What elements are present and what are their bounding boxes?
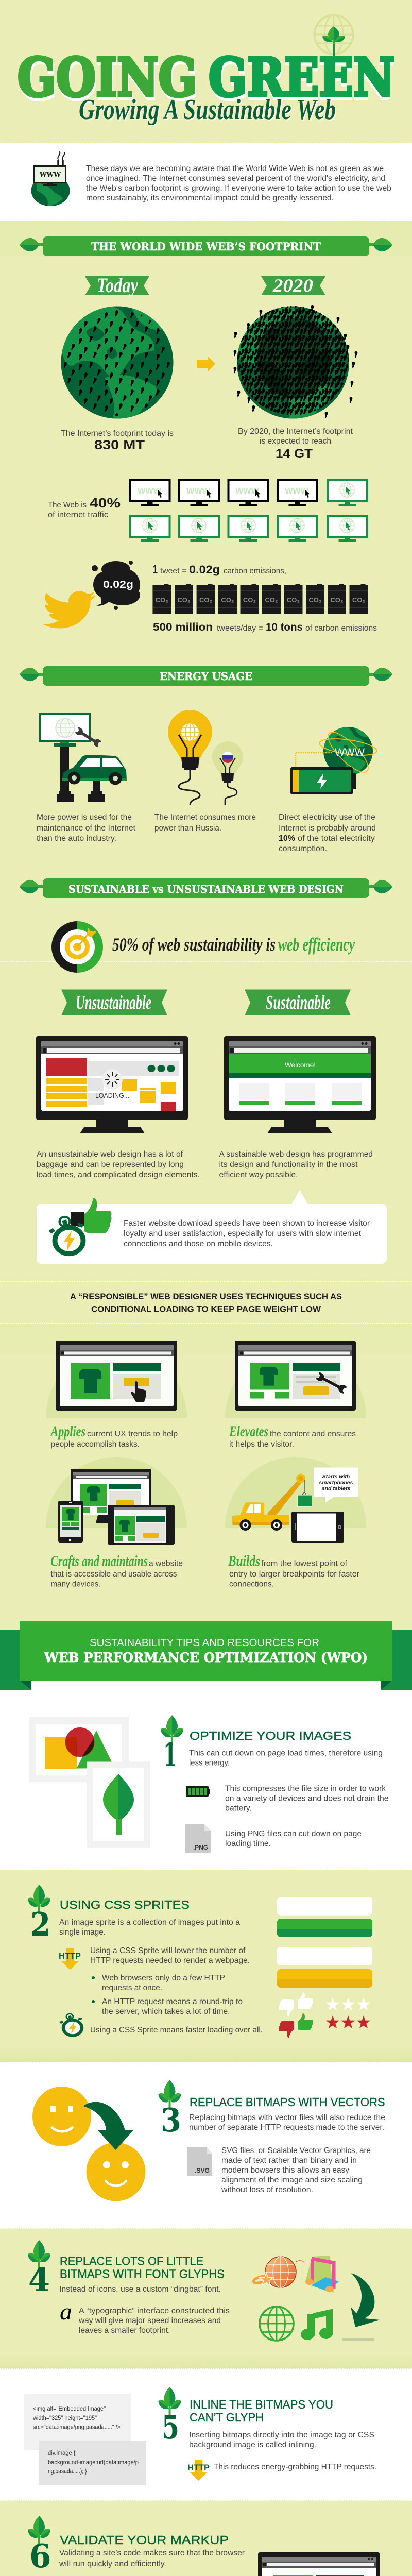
text: electricity fact: Direct electricity use of the (279, 813, 375, 822)
text: PNG: loading time. (225, 1839, 271, 1848)
text: electricity fact (279, 813, 376, 853)
heading: USING CSS SPRITES (60, 1898, 190, 1911)
text: electricity fact: of the total electricity (298, 834, 375, 843)
description (59, 2549, 245, 2568)
text: 2020 footprint: 14 GT (276, 447, 313, 461)
description: Inserting bitmaps directly into the image tag or CSS (189, 2431, 374, 2439)
text: applies: people accomplish tasks. (50, 1440, 140, 1449)
text: SVG: without loss of resolution. (221, 2185, 313, 2194)
bullet list: Web browsers only do a few HTTP (102, 1974, 225, 1982)
bullet list: requests at once. (102, 1984, 162, 1992)
text: elevates (229, 1423, 356, 1449)
heading (190, 2398, 333, 2424)
illustration: inline code boxes: src="data:image/png;pasada....." /> (33, 2425, 121, 2431)
icon: plant number 2 (28, 1885, 50, 1943)
text: tweet carbon emissions: 1 (153, 563, 158, 577)
ribbon: today: Today (97, 274, 138, 297)
text: web share of traffic: of internet traffic (48, 511, 108, 519)
bullet list (92, 1974, 243, 2016)
chart: CO2 barrels: CO₂ (177, 596, 191, 604)
text: 50 percent web efficiency: web efficiency (278, 934, 355, 955)
text: applies: Applies (50, 1423, 85, 1440)
bullet list: the server, which takes a lot of time. (102, 2007, 230, 2016)
title (18, 47, 394, 112)
illustration: inline code boxes: width="325" height="195" (32, 2415, 97, 2421)
heading: OPTIMIZE YOUR IMAGES (190, 1729, 351, 1742)
description: number of separate HTTP requests made to the server. (189, 2123, 384, 2132)
text: sustainable description: efficient way possible. (219, 1171, 298, 1179)
icon: plant number 4 (28, 2240, 50, 2299)
intro text: once imagined. The Internet consumes several percent of the world's electricity, and (86, 174, 385, 183)
text: unsustainable description: An unsustainable web design has a lot of (37, 1150, 183, 1159)
intro text (86, 164, 391, 202)
icon: plant number 1: 1 (163, 1736, 177, 1774)
callout text: Faster website download speeds have been shown to increase visitor (124, 1219, 370, 1228)
text: unsustainable description: load times, and complicated design elements. (37, 1171, 200, 1179)
text: crafts and maintains: Crafts and maintains (50, 1553, 148, 1569)
monitor: unsustainable design: LOADING... (95, 1092, 129, 1099)
text: elevates: the content and ensures (270, 1430, 356, 1438)
text: crafts and maintains: a website (149, 1559, 183, 1568)
panel: applies UX trends (46, 1341, 187, 1418)
chart: monitors 40 percent web traffic: WWW (138, 487, 162, 496)
intro text: more sustainably, its environmental impact could be greatly lessened. (86, 194, 334, 202)
description (189, 2113, 385, 2132)
text: tweet carbon emissions: carbon emissions, (224, 567, 286, 575)
text: battery: on a variety of devices and does not drain the (225, 1794, 388, 1803)
icon: small bulb with Russian flag (212, 741, 243, 805)
heading (60, 2255, 225, 2280)
text: battery: battery. (225, 1804, 252, 1812)
text: 50 percent web efficiency: 50% of web sustainability is (112, 934, 276, 955)
icon: plant number 6 (28, 2516, 52, 2575)
chart: CO2 barrels: CO₂ (287, 596, 300, 604)
illustration: optimized image frames (29, 1717, 150, 1848)
icon: SVG file (187, 2147, 212, 2176)
ribbon: 2020: 2020 (272, 275, 313, 296)
ribbon: sustainable: Sustainable (266, 992, 331, 1013)
text: today's footprint: 830 MT (94, 438, 145, 452)
text: builds: from the lowest point of (261, 1559, 348, 1568)
banner: web performance optimization (0, 1621, 412, 1690)
banner: web performance optimization: SUSTAINABILITY TIPS AND RESOURCES FOR (90, 1637, 319, 1649)
text: SVG: alignment of the image and size scaling (221, 2176, 363, 2184)
bullet list: An HTTP request means a round-trip to (102, 1997, 243, 2006)
text: crafts and maintains: that is accessible and usable across (50, 1570, 177, 1579)
text: PNG (225, 1829, 362, 1848)
text: http requests: HTTP requests needed to render a webpage. (90, 1956, 250, 1965)
panel: builds from lowest point (225, 1457, 366, 1543)
callout text: connections and those on mobile devices. (124, 1240, 273, 1248)
arrow: today to 2020 (197, 356, 215, 372)
heading: energy usage: ENERGY USAGE (160, 670, 252, 683)
chart: CO2 barrels: CO₂ (156, 596, 168, 604)
text: russia fact (154, 813, 256, 833)
banner: web performance optimization: WEB PERFORMANCE OPTIMIZATION (WPO) (44, 1650, 368, 1665)
heading: REPLACE BITMAPS WITH VECTORS (190, 2095, 385, 2109)
text: electricity fact: consumption. (279, 844, 327, 853)
description: single image. (59, 1928, 106, 1937)
text: today's footprint: The Internet’s footprint today is (61, 429, 174, 438)
text: SVG: SVG files, or Scalable Vector Graphics, are (221, 2146, 371, 2155)
description: less energy. (189, 1759, 230, 1768)
text: typographic interface (78, 2307, 230, 2335)
text: sustainable description: its design and functionality in the most (219, 1160, 358, 1169)
text: 2020 footprint: is expected to reach (260, 437, 331, 446)
panel: builds from lowest point: Starts with (322, 1473, 350, 1480)
text: car industry fact: More power is used for the (37, 813, 132, 822)
chart: monitors 40 percent web traffic: WWW (186, 487, 211, 496)
text: typographic interface: A “typographic” interface constructed this (79, 2307, 230, 2315)
tip 2: using css sprites (28, 1885, 372, 2038)
text: battery (225, 1784, 388, 1812)
description: This can cut down on page load times, therefore using (189, 1749, 383, 1758)
text: web share of traffic: The Web is (48, 501, 87, 510)
text: electricity fact: 10% (279, 834, 295, 843)
chart: CO2 barrels: CO₂ (265, 596, 278, 604)
heading: REPLACE LOTS OF LITTLE (60, 2255, 203, 2268)
text: 500 million tweets: 500 million (153, 621, 213, 633)
icon: plant number 3 (159, 2080, 181, 2139)
tip 4: font glyphs (28, 2240, 380, 2341)
icon: plant number 5 (159, 2387, 181, 2446)
monitor: unsustainable design (36, 1036, 188, 1133)
chart: CO2 barrels: CO₂ (330, 596, 344, 604)
text: unsustainable description: baggage and can be represented by long (37, 1160, 184, 1169)
text: SVG (221, 2146, 371, 2194)
text: 500 million tweets: 10 tons (266, 621, 303, 633)
text: faster loading: Using a CSS Sprite means faster loading over all. (90, 2026, 263, 2035)
text: http requests: This reduces energy-grabbing HTTP requests. (214, 2463, 376, 2471)
icon: SVG file: .SVG (195, 2167, 210, 2174)
intro text: the Web's carbon footprint is growing. If everyone were to take action to use the web (86, 184, 391, 193)
heading: sustainable vs unsustainable (20, 878, 392, 898)
text: crafts and maintains (50, 1553, 183, 1589)
text: 500 million tweets: tweets/day = (217, 624, 263, 633)
icon: letter a: a (60, 2298, 72, 2325)
heading: CAN’T GLYPH (190, 2411, 264, 2424)
icon: http arrow (187, 2460, 210, 2481)
description: background image is called inlining. (189, 2441, 316, 2449)
text: http requests (90, 1946, 250, 1965)
description: An image sprite is a collection of images put into a (59, 1918, 240, 1927)
description (189, 1749, 383, 1768)
text: builds: entry to larger breakpoints for faster (229, 1570, 359, 1579)
text: tweet carbon emissions: tweet = (160, 567, 186, 575)
text: elevates: it helps the visitor. (229, 1440, 294, 1449)
text: 500 million tweets: of carbon emissions (305, 624, 377, 633)
icon: globe and battery (290, 727, 377, 794)
monitor: sustainable design (224, 1036, 376, 1133)
callout text (124, 1219, 370, 1248)
panel: elevates content (225, 1341, 366, 1418)
text: sustainable description (219, 1150, 373, 1179)
heading: the world wide web's footprint: THE WORLD WIDE WEB’S FOOTPRINT (91, 240, 321, 253)
panel: builds from lowest point: and tablets (322, 1486, 350, 1492)
icon: battery (186, 1786, 210, 1797)
intro text: These days we are becoming aware that the World Wide Web is not as green as we (86, 164, 384, 173)
text: 500 million tweets (153, 621, 377, 633)
tip 3: replace bitmaps with vectors (159, 2080, 385, 2194)
heading: responsible web designer: A “RESPONSIBLE” WEB DESIGNER USES TECHNIQUES SUCH AS (70, 1292, 342, 1301)
chart: CO2 barrels: CO₂ (308, 596, 322, 604)
icon: monitor with smokestacks on globe (31, 151, 70, 206)
icon: plant number 2: 2 (30, 1905, 50, 1943)
chart: CO2 barrels (152, 584, 368, 614)
callout: carbon cloud (92, 561, 140, 610)
icon: PNG file: .PNG (193, 1844, 208, 1851)
ribbon: sustainable (245, 989, 351, 1015)
chart: CO2 barrels: CO₂ (199, 596, 212, 604)
text: typographic interface: leaves a smaller footprint. (79, 2326, 170, 2335)
text: sustainable description: A sustainable web design has programmed (219, 1150, 373, 1159)
description: Replacing bitmaps with vector files will also reduce the (189, 2113, 385, 2122)
text: elevates: Elevates (229, 1423, 268, 1440)
tip 6: validate your markup (0, 2516, 412, 2576)
heading: INLINE THE BITMAPS YOU (190, 2398, 333, 2411)
title: GOING (19, 50, 198, 112)
text: web share of traffic: 40% (90, 495, 121, 511)
text: electricity fact: Internet is probably around (279, 824, 376, 833)
text: applies: current UX trends to help (87, 1430, 178, 1438)
text: http requests: Using a CSS Sprite will lower the number of (90, 1946, 246, 1955)
icon: http arrow: HTTP (59, 1951, 81, 1961)
text: builds: connections. (229, 1580, 274, 1589)
text: PNG: Using PNG files can cut down on page (225, 1829, 362, 1838)
icon: globe with plant (314, 15, 353, 58)
globe: 2020 footprint (234, 305, 357, 420)
monitor: sustainable design: Welcome! (285, 1061, 316, 1069)
icon: twitter bird (43, 591, 96, 628)
illustration: validated website monitor (258, 2552, 391, 2576)
chart: CO2 barrels: CO₂ (221, 596, 234, 604)
text: battery: This compresses the file size in order to work (225, 1784, 386, 1793)
heading: the world wide web's footprint (20, 236, 392, 256)
icon: stopwatch and thumbs up (46, 1198, 112, 1254)
callout: carbon cloud: 0.02g (103, 579, 133, 590)
heading: responsible web designer (70, 1292, 342, 1314)
description: Validating a site’s code makes sure that the browser (59, 2549, 245, 2557)
description: will run quickly and efficiently. (59, 2560, 166, 2568)
illustration: inline code boxes: <img alt="Embedded Image" (33, 2406, 106, 2412)
icon: plant number 5: 5 (162, 2408, 179, 2446)
description: Instead of icons, use a custom “dingbat” font. (59, 2285, 221, 2294)
icon: globe and battery: WWW (335, 747, 365, 758)
panel: intro (31, 151, 391, 206)
icon: http arrow (59, 1948, 81, 1970)
panel: crafts and maintains (46, 1457, 187, 1545)
ribbon: 2020 (261, 275, 325, 296)
icon: plant number 3: 3 (161, 2101, 181, 2139)
text: 2020 footprint (238, 427, 353, 461)
globe: today's footprint (61, 306, 173, 420)
illustration: inline code boxes: background-image:url(data:image/p (48, 2460, 139, 2466)
icon: monitor on car lift (40, 714, 127, 802)
icon: PNG file (185, 1824, 211, 1853)
subtitle: Growing A Sustainable Web (79, 94, 336, 126)
text: tweet carbon emissions: 0.02g (189, 563, 220, 576)
illustration: inline code boxes: ng;pasada.....); } (48, 2469, 87, 2475)
text: tweet carbon emissions (153, 563, 286, 577)
heading: energy usage (20, 666, 392, 686)
icon: monitor with smokestacks on globe: WWW (39, 171, 61, 178)
text: car industry fact: maintenance of the Internet (37, 824, 136, 833)
text: applies (50, 1423, 178, 1449)
text: builds: Builds (228, 1553, 260, 1569)
heading: BITMAPS WITH FONT GLYPHS (60, 2267, 225, 2280)
text: SVG: made of text rather than binary and in (221, 2156, 357, 2165)
text: SVG: modern bowsers this allows an easy (221, 2166, 349, 2175)
text: car industry fact: than the auto industry. (37, 834, 116, 843)
text: today's footprint (61, 429, 174, 452)
text: unsustainable description (37, 1150, 200, 1179)
chart: monitors 40 percent web traffic: WWW (235, 487, 260, 496)
text: crafts and maintains: many devices. (50, 1580, 101, 1589)
chart: CO2 barrels: CO₂ (352, 596, 365, 604)
tip 5: inline the bitmaps (159, 2387, 376, 2481)
illustration: inline code boxes (24, 2394, 146, 2485)
text: car industry fact (37, 813, 136, 843)
icon: target (52, 921, 103, 973)
icon: stopwatch (58, 2012, 82, 2036)
illustration: sprite sheet (277, 1897, 372, 2038)
icon: plant number 1 (161, 1715, 183, 1774)
illustration: bitmap icons to glyphs (253, 2256, 380, 2341)
chart: monitors 40 percent web traffic: WWW (285, 487, 309, 496)
callout text: loyalty and user satisfaction, especially for users with slow internet (124, 1229, 362, 1238)
tip 1: optimize your images (161, 1715, 388, 1853)
text: web share of traffic (48, 495, 121, 519)
chart: monitors 40 percent web traffic (130, 480, 367, 542)
illustration: bitmap smiley to vector smiley (32, 2087, 145, 2201)
text: builds (228, 1553, 359, 1589)
description (189, 2431, 374, 2449)
callout: faster download speeds (37, 1190, 387, 1264)
illustration: inline code boxes: div.image { (48, 2450, 76, 2456)
text: russia fact: power than Russia. (154, 824, 221, 833)
icon: plant number 6: 6 (29, 2537, 52, 2575)
ribbon: unsustainable: Unsustainable (76, 992, 151, 1013)
description (59, 1918, 240, 1937)
text: russia fact: The Internet consumes more (154, 813, 256, 822)
icon: large bulb (168, 710, 212, 805)
heading: VALIDATE YOUR MARKUP (60, 2533, 229, 2547)
subtitle: Growing A Sustainable Web (80, 95, 337, 127)
panel: builds from lowest point: smartphones (319, 1480, 353, 1486)
icon: plant number 4: 4 (28, 2261, 50, 2299)
heading: sustainable vs unsustainable: SUSTAINABLE vs UNSUSTAINABLE WEB DESIGN (68, 883, 344, 895)
title: GOING (18, 47, 197, 109)
ribbon: unsustainable (61, 989, 167, 1015)
heading: responsible web designer: CONDITIONAL LOADING TO KEEP PAGE WEIGHT LOW (91, 1304, 321, 1314)
text: 2020 footprint: By 2020, the Internet’s footprint (238, 427, 353, 436)
chart: CO2 barrels: CO₂ (243, 596, 256, 604)
icon: http arrow: HTTP (187, 2463, 210, 2472)
text: typographic interface: way will give major speed increases and (78, 2316, 221, 2325)
